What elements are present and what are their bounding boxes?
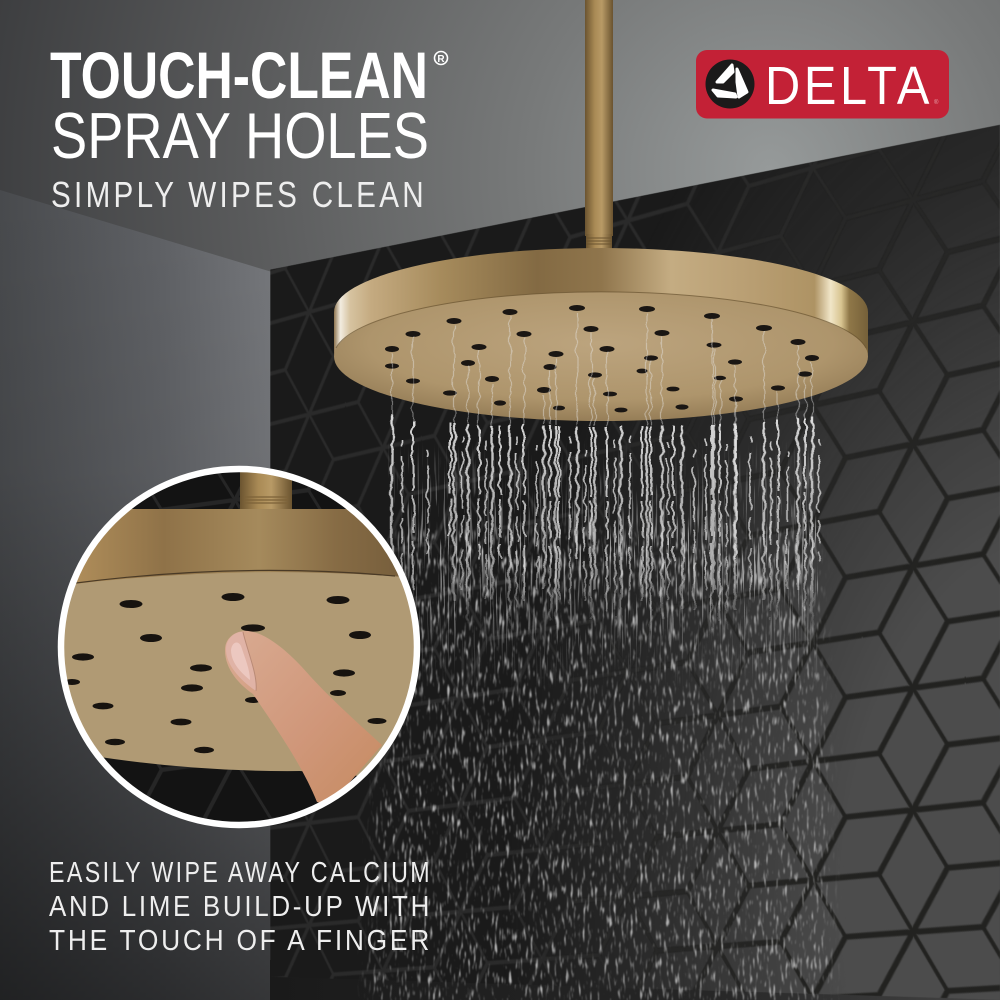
inset plate: [64, 572, 414, 776]
head underside plate: [334, 292, 868, 421]
inset spray holes: [64, 593, 386, 753]
tagline: SIMPLY WIPES CLEAN: [51, 174, 427, 215]
streams below the plate, group three: [402, 436, 819, 630]
droplets falling from the head: [340, 440, 850, 1000]
registered mark: [434, 52, 448, 65]
ceiling pipe: [585, 0, 613, 250]
head rim: [334, 248, 868, 418]
logo: Delta: [696, 50, 949, 118]
inset rim: [76, 509, 399, 584]
logo emblem: [706, 60, 754, 108]
spray holes: [385, 305, 819, 412]
title: TOUCH-CLEAN: [50, 38, 428, 112]
shower head: [334, 248, 868, 421]
description text: EASILY WIPE AWAY CALCIUM: [49, 857, 432, 889]
streams below the plate, group one: [392, 416, 812, 640]
tiled hexagon wall: [270, 124, 1000, 1000]
registered mark: R: [437, 54, 445, 65]
description text: AND LIME BUILD-UP WITH: [49, 891, 432, 923]
streams below the plate, group two: [413, 418, 805, 630]
description text: [49, 857, 432, 957]
water streams: [392, 311, 819, 640]
streams over the plate: [392, 311, 812, 425]
logo: Delta: DELTA: [765, 56, 933, 116]
logo: Delta: ®: [934, 99, 939, 106]
description text: THE TOUCH OF A FINGER: [49, 925, 432, 957]
finger: [225, 631, 382, 805]
subtitle: SPRAY HOLES: [51, 99, 429, 172]
inset pipe fitting: [240, 470, 292, 510]
inset detail circle: [50, 460, 430, 840]
